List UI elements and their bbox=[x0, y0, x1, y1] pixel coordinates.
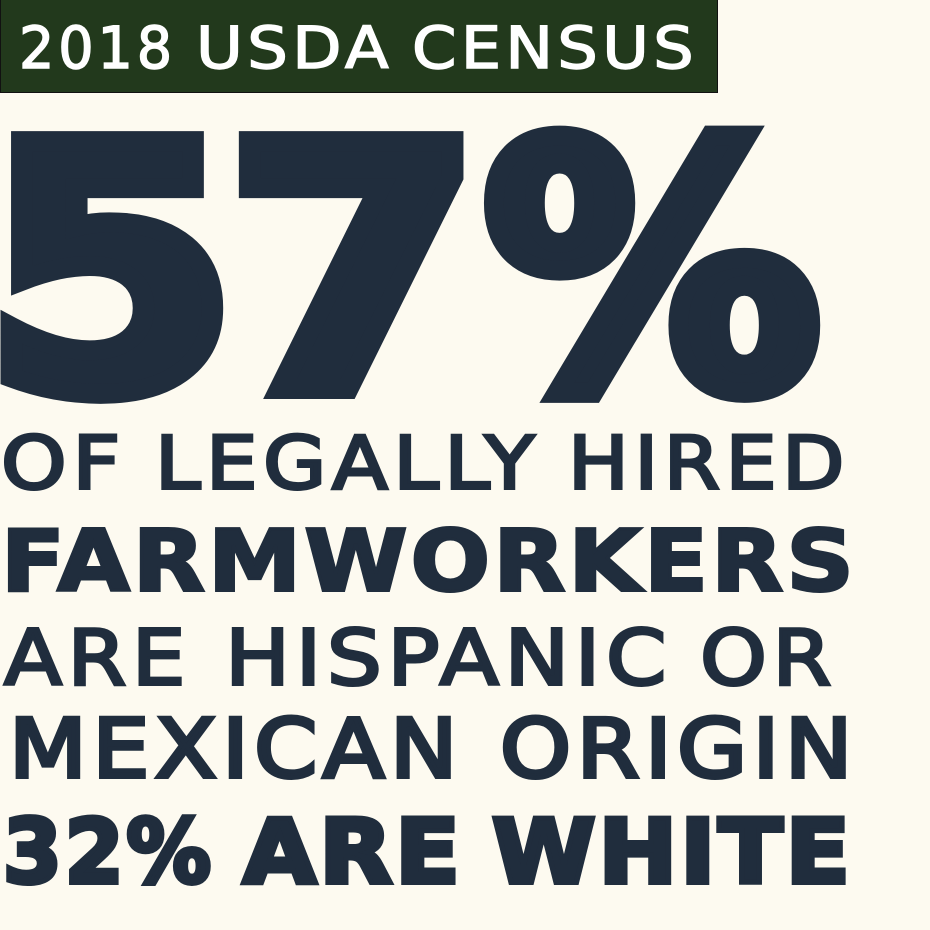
header banner bbox=[0, 0, 718, 92]
text line: are hispanic or: HISPANIC bbox=[225, 614, 672, 704]
headline statistic: 57% bbox=[0, 73, 821, 470]
headline statistic: 57%: 7 bbox=[225, 74, 482, 470]
text line: farmworkers: FARMWORKERS bbox=[1, 512, 857, 612]
text line: of legally hired bbox=[1, 422, 850, 506]
header banner: USDA bbox=[196, 14, 393, 82]
headline statistic: 57%: % bbox=[483, 73, 821, 469]
text line: 32% are white: ARE bbox=[243, 800, 463, 904]
text line: of legally hired: OF bbox=[1, 422, 126, 506]
text line: of legally hired: HIRED bbox=[568, 422, 850, 506]
text line: 32% are white: WHITE bbox=[492, 800, 853, 904]
text line: of legally hired: LEGALLY bbox=[155, 422, 540, 506]
text line: 32% are white bbox=[3, 800, 853, 904]
text line: are hispanic or bbox=[4, 614, 837, 704]
header banner: CENSUS bbox=[412, 14, 698, 82]
text line: mexican origin bbox=[9, 703, 858, 797]
text line: are hispanic or: ARE bbox=[4, 614, 191, 704]
text line: are hispanic or: OR bbox=[700, 614, 837, 704]
text line: 32% are white: 32% bbox=[3, 800, 214, 904]
text line: mexican origin: ORIGIN bbox=[500, 703, 858, 797]
header banner: 2018 bbox=[19, 14, 176, 82]
text line: mexican origin: MEXICAN bbox=[9, 703, 463, 797]
